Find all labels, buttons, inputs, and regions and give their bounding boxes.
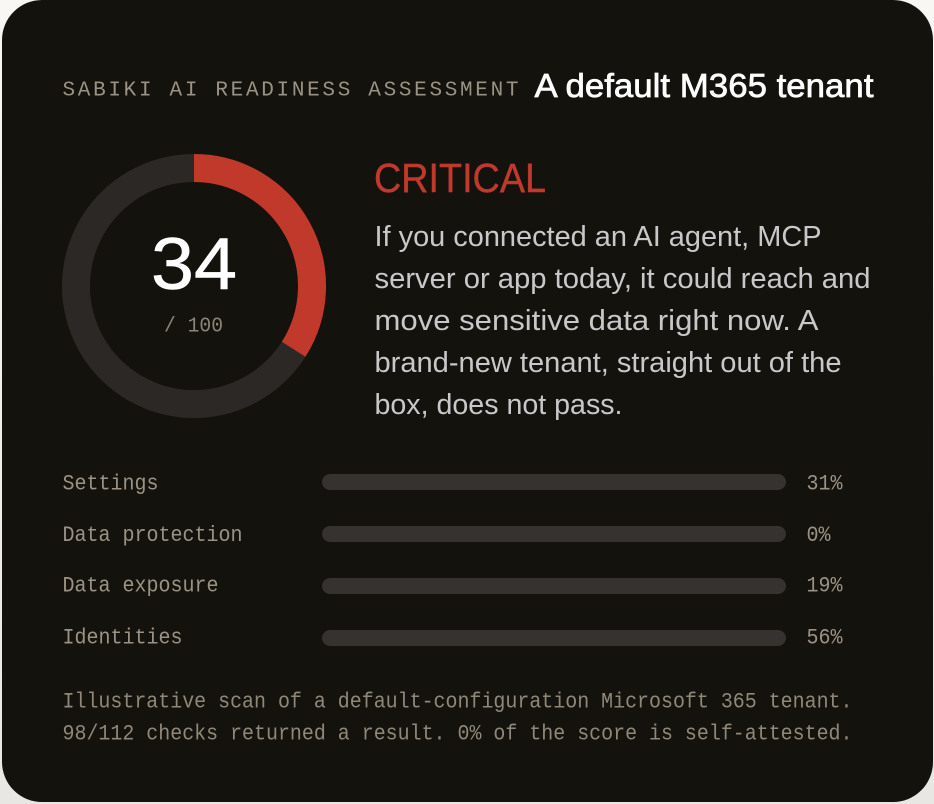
row: Settings xyxy=(62,472,843,496)
row: Data exposure: 19% xyxy=(806,574,843,598)
footnote: Illustrative scan of a default-configuration Microsoft 365 tenant. xyxy=(62,690,852,714)
footnote: 98/112 checks returned a result. 0% of the score is self-attested. xyxy=(62,722,852,746)
row: Identities: Identities xyxy=(62,626,182,650)
footnote xyxy=(62,690,852,746)
verdict description: server or app today, it could reach and xyxy=(374,263,870,295)
verdict block xyxy=(374,155,870,421)
verdict description xyxy=(374,221,870,421)
donut track xyxy=(76,168,312,404)
score denominator: / 100 xyxy=(164,316,223,338)
row: Settings: 31% xyxy=(806,472,843,496)
donut value arc: 34 percent xyxy=(194,168,312,349)
verdict description: brand-new tenant, straight out of the xyxy=(374,347,842,379)
row: Settings: Settings xyxy=(62,472,158,496)
row: Identities: 56% xyxy=(806,626,843,650)
verdict description: move sensitive data right now. A xyxy=(374,305,819,337)
row: Data protection: 0% xyxy=(806,523,831,548)
score number: 34 xyxy=(151,224,237,305)
donut score chart xyxy=(76,168,312,404)
eyebrow label: SABIKI AI READINESS ASSESSMENT xyxy=(62,80,518,102)
row: Data protection: Data protection xyxy=(62,523,242,548)
heading: tenant title: A default M365 tenant xyxy=(534,67,874,104)
verdict description: If you connected an AI agent, MCP xyxy=(374,221,822,253)
verdict heading: CRITICAL xyxy=(374,155,546,201)
verdict description: box, does not pass. xyxy=(374,389,622,421)
category score rows xyxy=(62,472,843,650)
row: Data exposure xyxy=(62,574,843,598)
row: Data exposure: Data exposure xyxy=(62,574,218,598)
header xyxy=(62,67,874,104)
row: Identities xyxy=(62,626,843,650)
row: Data protection xyxy=(62,523,831,548)
